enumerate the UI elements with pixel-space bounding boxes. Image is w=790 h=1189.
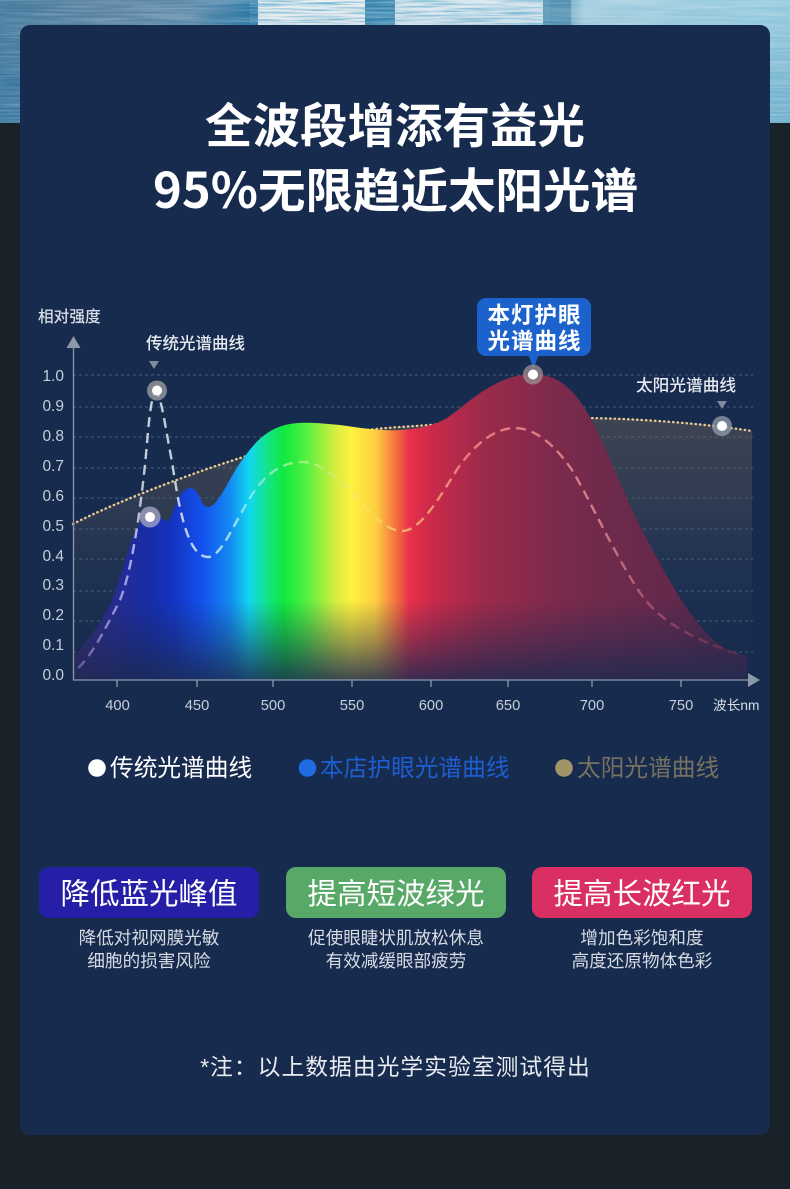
marker: sun spectrum	[712, 416, 732, 436]
x axis labels: 600	[419, 698, 443, 714]
label: sun spectrum: 太阳光谱曲线	[636, 376, 736, 395]
panel: lower blue peak: 细胞的损害风险	[87, 951, 211, 971]
axes	[74, 344, 750, 687]
y axis labels: 0.8	[42, 428, 64, 445]
y axis labels: 0.6	[42, 488, 64, 505]
label: traditional spectrum: 传统光谱曲线	[146, 334, 245, 353]
title	[153, 101, 638, 223]
y axis labels: 1.0	[42, 368, 64, 385]
x axis labels: 450	[185, 698, 209, 714]
x axis labels: 750	[669, 698, 693, 714]
panel: raise long-wave red: 提高长波红光	[553, 878, 731, 911]
footnote: *注：以上数据由光学实验室测试得出	[200, 1054, 591, 1080]
axis arrows	[66, 336, 760, 687]
panel: raise short-wave green: 促使眼睫状肌放松休息	[308, 928, 484, 948]
legend: this store: 本店护眼光谱曲线	[320, 755, 510, 782]
x axis labels: 550	[340, 698, 364, 714]
x axis labels	[105, 698, 693, 714]
spectrum chart	[38, 298, 760, 714]
x axis title: 波长nm	[713, 698, 759, 713]
panel: raise short-wave green	[286, 867, 506, 971]
y axis labels: 0.9	[42, 398, 64, 415]
legend: traditional: 传统光谱曲线	[110, 755, 252, 782]
y axis labels: 0.0	[42, 667, 64, 684]
traditional spectrum dashed curve	[78, 392, 740, 668]
y axis labels: 0.2	[42, 607, 64, 624]
sun spectrum curve	[73, 418, 752, 524]
callout: this lamp spectrum: 本灯护眼	[487, 303, 582, 328]
legend	[88, 755, 719, 782]
callout: this lamp spectrum	[477, 298, 591, 369]
marker: lamp peak	[523, 364, 543, 384]
panel: raise long-wave red: 高度还原物体色彩	[572, 951, 713, 971]
grid lines	[73, 375, 753, 652]
panel: raise long-wave red: 增加色彩饱和度	[580, 928, 704, 948]
y axis labels: 0.4	[42, 548, 64, 565]
y axis title: 相对强度	[38, 308, 101, 326]
legend: sun: 太阳光谱曲线	[577, 755, 719, 782]
water photo strip	[0, 0, 790, 123]
sun spectrum fill	[73, 418, 752, 680]
y axis labels: 0.1	[42, 637, 64, 654]
y axis labels	[42, 368, 64, 684]
panel: lower blue peak: 降低对视网膜光敏	[79, 928, 219, 948]
y axis labels: 0.7	[42, 458, 64, 475]
panel: raise short-wave green: 提高短波绿光	[307, 878, 485, 911]
label: traditional spectrum	[146, 334, 245, 369]
title: 95%无限趋近太阳光谱	[153, 152, 638, 223]
y axis labels: 0.5	[42, 518, 64, 535]
panel: lower blue peak: 降低蓝光峰值	[60, 878, 238, 911]
panel: lower blue peak	[39, 867, 259, 971]
lamp spectrum rainbow area	[73, 370, 753, 680]
x axis labels: 500	[261, 698, 285, 714]
marker: traditional low	[140, 506, 160, 528]
panel: raise long-wave red	[532, 867, 752, 971]
callout: this lamp spectrum: 光谱曲线	[487, 329, 582, 354]
x axis labels: 700	[580, 698, 604, 714]
y axis labels: 0.3	[42, 577, 64, 594]
title: 全波段增添有益光	[205, 101, 585, 154]
marker: traditional peak	[147, 380, 167, 400]
panel: raise short-wave green: 有效减缓眼部疲劳	[326, 951, 466, 971]
x axis labels: 400	[105, 698, 130, 714]
label: sun spectrum	[636, 376, 736, 409]
x axis labels: 650	[496, 698, 520, 714]
